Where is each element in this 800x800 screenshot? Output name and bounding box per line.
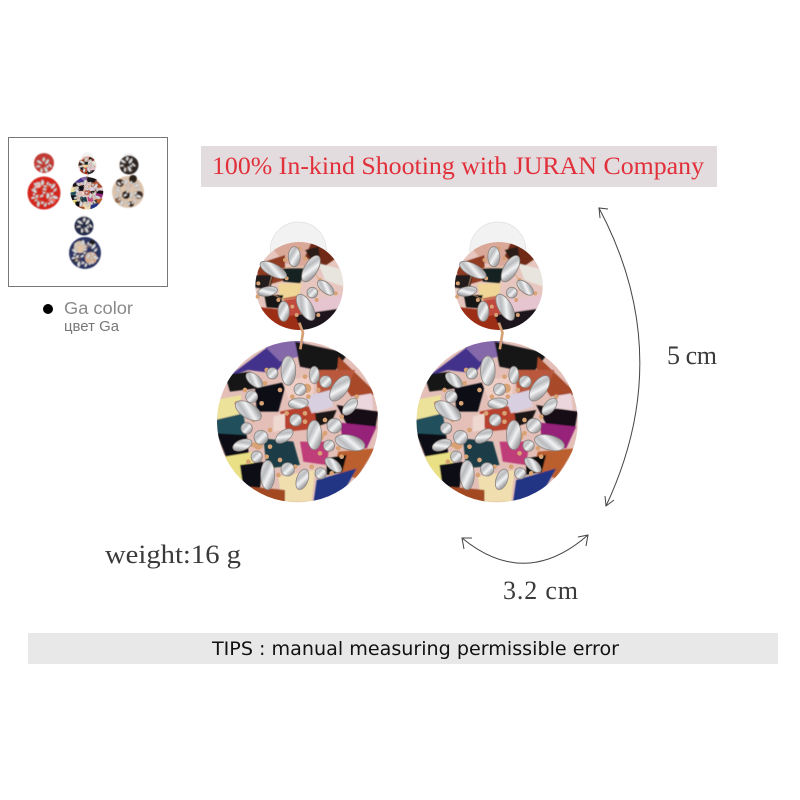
earring photo: right	[414, 222, 578, 505]
earring photo: left	[215, 222, 378, 505]
legend bullet	[43, 304, 53, 314]
label: height 5 cm: 5 cm	[667, 341, 717, 370]
title banner: 100% In-kind Shooting with JURAN Company	[212, 151, 704, 180]
colour legend	[43, 298, 133, 335]
arrow: height arc	[599, 208, 640, 506]
title banner	[201, 146, 717, 187]
tips banner	[28, 633, 778, 664]
thumbnail: beige earring	[112, 153, 144, 208]
thumbnail: multicolour earring	[70, 152, 103, 210]
panel: colour option thumbnails	[8, 138, 168, 286]
label: weight: weight:16 g	[105, 540, 241, 569]
thumbnail: navy earring	[69, 215, 101, 269]
legend text: Ga color: Ga color	[64, 298, 133, 318]
thumbnail: red earring	[28, 152, 60, 210]
label: width 3.2 cm: 3.2 cm	[503, 576, 578, 605]
legend text: russian: цвет Ga	[64, 319, 120, 335]
tips banner: TIPS : manual measuring permissible error	[211, 638, 619, 660]
arrow: width arc	[462, 535, 588, 563]
